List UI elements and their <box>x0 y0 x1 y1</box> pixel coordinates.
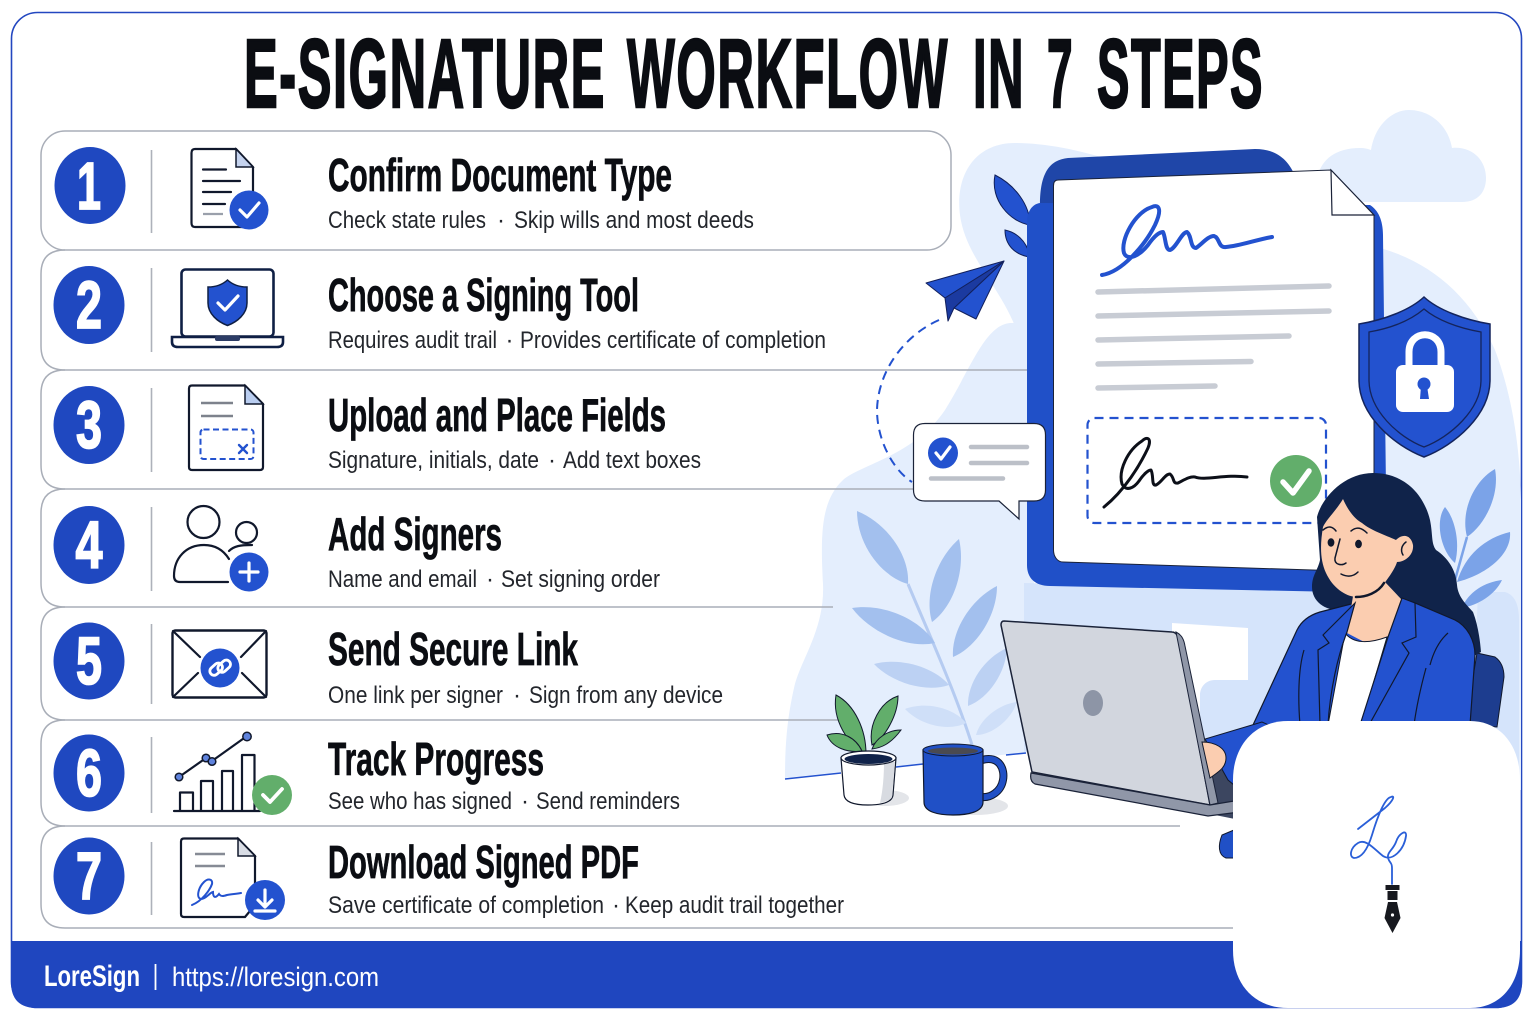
details 7: Keep audit trail together <box>625 892 844 919</box>
number badge 6 <box>54 734 124 812</box>
row 2 outline <box>41 250 1030 370</box>
number badge 7 <box>54 838 124 914</box>
hand <box>1202 742 1226 778</box>
heading 5: Send Secure Link <box>328 623 578 675</box>
title: 7 <box>1047 19 1074 128</box>
details 7: · <box>612 892 620 919</box>
step 1 <box>54 147 754 234</box>
number badge 5 <box>54 622 124 700</box>
coffee mug <box>923 744 1008 815</box>
step rows <box>41 131 1240 928</box>
heading 2: Choose a Signing Tool <box>328 269 639 321</box>
details 1: Skip wills and most deeds <box>514 207 754 234</box>
blue tablet behind document <box>1027 149 1386 592</box>
number badge 4: 4 <box>76 508 102 583</box>
number badge 2 <box>54 266 124 344</box>
number badge 7: 7 <box>76 839 102 914</box>
icon: envelope with link <box>172 630 266 698</box>
details 4: Set signing order <box>501 566 660 593</box>
number badge 4 <box>54 506 124 584</box>
step 7 <box>54 836 844 920</box>
footer bar <box>11 941 1522 1008</box>
text lines <box>1098 286 1329 388</box>
heading 1: Confirm Document Type <box>328 149 672 201</box>
neck <box>1347 582 1402 645</box>
lapels <box>1318 603 1355 725</box>
logo panel <box>1233 721 1520 1008</box>
dashed flight path <box>877 320 939 482</box>
step 6 <box>54 732 680 815</box>
notebook stack <box>1219 830 1240 858</box>
details 6: See who has signed <box>328 788 512 815</box>
heading 6: Track Progress <box>328 733 544 785</box>
laptop <box>1001 621 1240 820</box>
background plant <box>852 511 1017 748</box>
details 1: Check state rules <box>328 207 486 234</box>
number badge 5: 5 <box>76 624 102 699</box>
details 3: Signature, initials, date <box>328 447 539 474</box>
white shirt <box>1328 633 1387 725</box>
number badge 1 <box>54 147 126 224</box>
floor line <box>785 753 1026 779</box>
woman <box>1202 473 1504 790</box>
jacket <box>1253 600 1475 725</box>
details 3 <box>328 447 701 474</box>
details 2 <box>328 327 826 354</box>
row 4 outline <box>41 489 833 607</box>
title: IN <box>973 19 1025 128</box>
details 7 <box>328 892 844 919</box>
details 1: · <box>497 207 505 234</box>
row 7 outline <box>41 826 1240 928</box>
hair <box>1312 473 1481 660</box>
title: WORKFLOW <box>627 19 949 128</box>
chat bubble <box>914 424 1046 519</box>
signature flourish <box>1351 797 1406 884</box>
icon: paper airplane <box>926 261 1004 321</box>
number badge 6: 6 <box>76 736 102 811</box>
details 6: · <box>521 788 529 815</box>
title <box>244 19 1264 128</box>
number badge 3: 3 <box>76 388 102 463</box>
title: E-SIGNATURE <box>244 19 606 128</box>
small potted plant <box>827 695 909 806</box>
row 1 outline <box>41 131 951 250</box>
step 4 <box>54 506 660 593</box>
details 4 <box>328 566 660 593</box>
icon: cloud <box>1318 110 1486 202</box>
illustration background <box>785 143 1521 790</box>
details 7: Save certificate of completion <box>328 892 604 919</box>
details 3: Add text boxes <box>563 447 701 474</box>
document page <box>1054 170 1374 572</box>
number badge 1: 1 <box>77 149 101 224</box>
icon: progress chart <box>174 732 292 815</box>
blue signature <box>1102 206 1272 275</box>
page fold <box>1331 170 1374 215</box>
icon: add signer <box>174 506 268 592</box>
green approved check <box>1270 455 1322 507</box>
heading 3: Upload and Place Fields <box>328 389 666 441</box>
shield with padlock <box>1359 297 1490 457</box>
icon: signed document download <box>181 838 285 920</box>
brand name: LoreSign <box>44 960 140 993</box>
icon: document with field <box>189 386 263 470</box>
details 5 <box>328 682 723 709</box>
step 5 <box>54 622 723 709</box>
details 6: Send reminders <box>536 788 680 815</box>
details 2: · <box>506 327 514 354</box>
plant right of person <box>1440 469 1510 608</box>
details 4: Name and email <box>328 566 477 593</box>
details 2: Provides certificate of completion <box>520 327 826 354</box>
title: STEPS <box>1097 19 1264 128</box>
sleeve <box>1205 722 1280 790</box>
details 5: Sign from any device <box>529 682 723 709</box>
number badge 3 <box>54 386 124 464</box>
heading 7: Download Signed PDF <box>328 836 639 888</box>
leaves beside document <box>994 175 1030 257</box>
step 3 <box>54 386 701 474</box>
chair <box>1465 653 1504 727</box>
face <box>1321 499 1413 597</box>
details 3: · <box>548 447 556 474</box>
website url: https://loresign.com <box>172 962 379 992</box>
icon: document with check <box>192 149 268 230</box>
number badge 2: 2 <box>76 268 102 343</box>
details 2: Requires audit trail <box>328 327 497 354</box>
details 5: One link per signer <box>328 682 503 709</box>
row 5 outline <box>41 607 838 720</box>
step 2 <box>54 266 826 354</box>
fountain pen nib <box>1384 885 1400 933</box>
facial features <box>1323 527 1406 597</box>
signature field <box>1088 418 1326 523</box>
row 6 outline <box>41 720 1180 826</box>
heading 4: Add Signers <box>328 508 502 560</box>
black signature <box>1104 438 1247 507</box>
details 5: · <box>513 682 521 709</box>
row 3 outline <box>41 370 913 489</box>
details 1 <box>328 207 754 234</box>
icon: laptop with shield <box>172 270 283 347</box>
details 6 <box>328 788 680 815</box>
details 4: · <box>486 566 494 593</box>
